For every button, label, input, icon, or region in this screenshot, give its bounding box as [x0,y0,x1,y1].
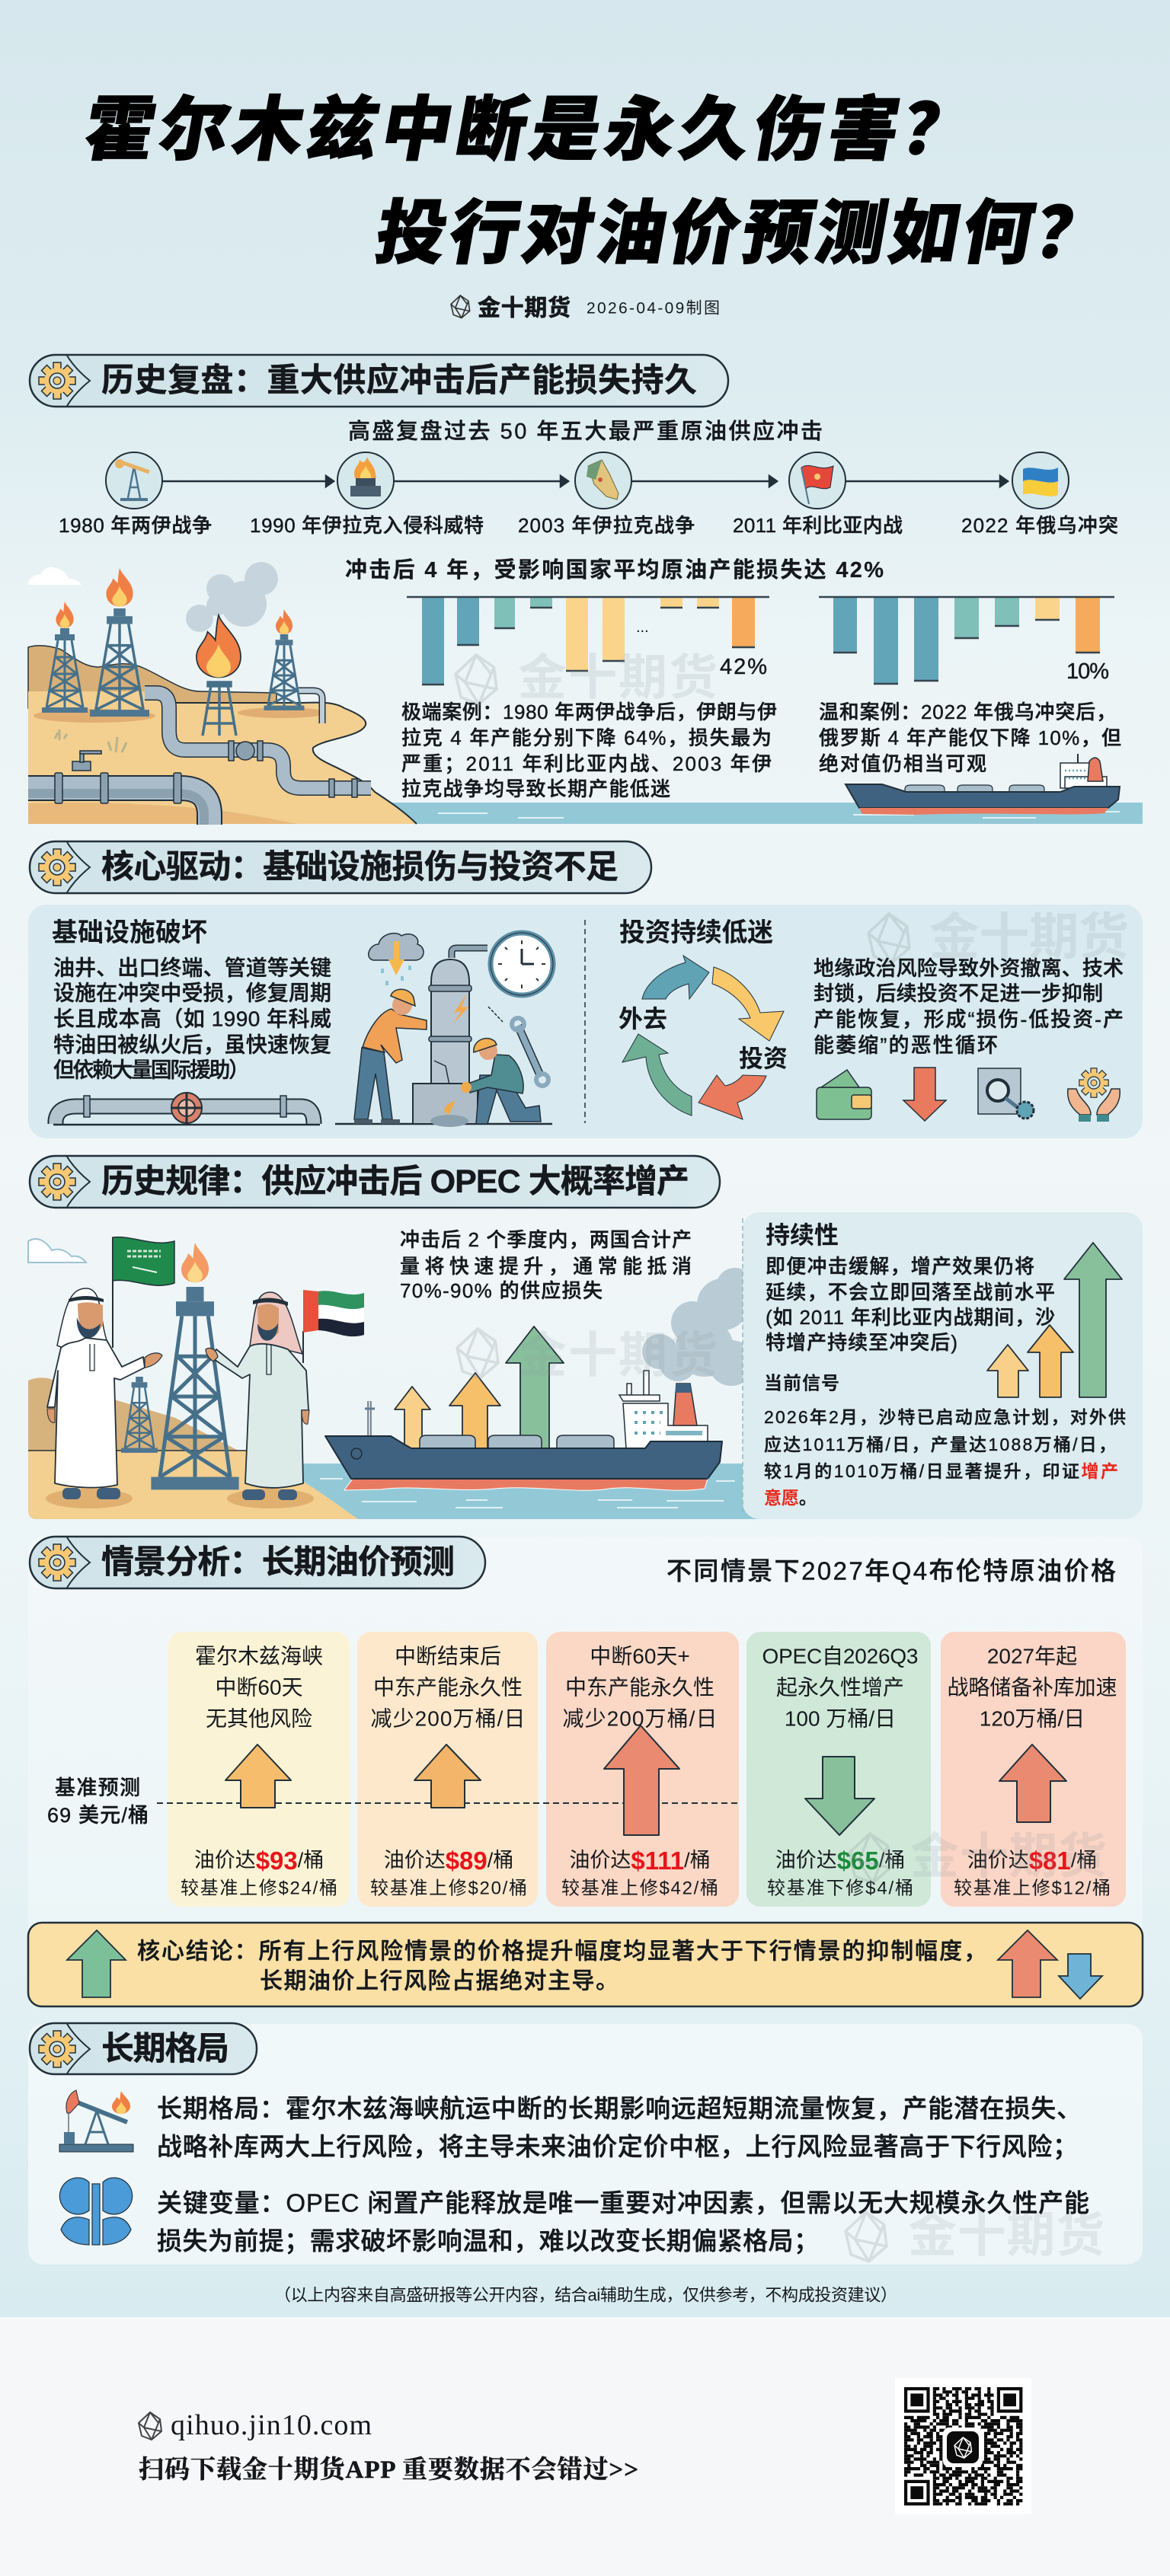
icon: down arrow [903,1068,946,1121]
card 4 [746,1632,931,1907]
cloud [369,934,424,960]
icon: pumpjack [106,452,162,509]
section header: 情景分析: 情景分析：长期油价预测 [101,1544,455,1581]
text: long-term outlook [157,2094,1082,2161]
price labels: 油价达$89/桶 [384,1846,513,1875]
subtitle: 产能损失 42%: 冲击后 4 年，受影响国家平均原油产能损失达 42% [345,557,884,583]
illustration: workers repairing tower [335,933,553,1127]
card 1: 中断60天 [215,1675,303,1700]
section header: 长期格局 [30,2023,257,2074]
card 1 [168,1632,350,1907]
person left [47,1288,162,1499]
bar chart: moderate case [819,597,1114,684]
panel: long-term outlook [28,2023,1143,2265]
text: moderate case: 绝对值仍相当可观 [819,752,986,775]
Saudi flag [113,1237,174,1348]
card 2 [357,1632,538,1907]
small dashed arrow [488,1007,503,1022]
card 5: 120万桶/日 [980,1707,1085,1730]
section header: 核心驱动 [30,841,651,893]
text: conclusion [137,1939,986,1993]
bar chart: moderate case: 10% [1066,659,1109,684]
watermark: 金十期货 [908,2207,1104,2262]
card 2: 减少200万桶/日 [370,1707,526,1730]
cloud [28,1239,86,1262]
change labels: 较基准上修$20/桶 [370,1878,527,1899]
icon: OPEC logo [59,2178,133,2245]
growth arrows [987,1243,1122,1397]
timeline labels: 2011 年利比亚内战 [733,514,903,537]
text: current signal [764,1407,1126,1508]
text: persistence: (如 2011 年利比亚内战期间，沙 [766,1306,1055,1329]
icon: wallet [817,1070,871,1119]
text: key variable: 损失为前提；需求破坏影响温和，难以改变长期偏紧格局； [157,2226,819,2255]
arrow: green [622,1034,692,1116]
card 4: OPEC自2026Q3 [762,1645,919,1668]
card 5: 2027年起 [987,1645,1077,1668]
arrow: red [698,1075,766,1119]
card 3: 中断60天+ [590,1645,690,1668]
text: persistence [766,1255,1055,1354]
text: infrastructure damage: 特油田被纵火后，虽快速恢复 [53,1033,331,1057]
illustration: broken pipe with valve [53,1093,320,1125]
arrow: red up [998,1930,1057,1997]
title [78,91,1114,273]
brand line [451,295,720,321]
text: infrastructure damage: 长且成本高（如 1990 年科威 [53,1007,331,1031]
baseline label [47,1776,149,1827]
QR code [895,2378,1031,2514]
divider [584,920,586,1123]
text: infrastructure damage: 设施在冲突中受损，修复周期 [53,981,331,1005]
icon: Libya flag [789,452,846,509]
card 3: 减少200万桶/日 [562,1707,718,1730]
timeline labels: 1990 年伊拉克入侵科威特 [250,514,484,537]
card 2: 中断结束后 [395,1645,501,1668]
price labels: 油价达$65/桶 [775,1846,905,1875]
cycle labels: 外去 [619,1005,667,1033]
baseline label: 69 美元/桶 [47,1804,149,1827]
sand [28,691,417,824]
text: infrastructure damage: 但依赖大量国际援助） [53,1058,250,1081]
disclaimer: （以上内容来自高盛研报等公开内容，结合ai辅助生成，仅供参考，不构成投资建议） [274,2286,897,2304]
text: conclusion: 核心结论：所有上行风险情景的价格提升幅度均显著大于下行情景的抑制幅度， [137,1939,986,1965]
UAE flag [303,1290,364,1363]
text: persistence: 延续，不会立即回落至战前水平 [766,1281,1055,1304]
sea [303,1464,762,1519]
bar chart: extreme case [407,597,769,685]
title: 投行对油价预测如何？ [370,194,1114,273]
flare stack [203,682,236,736]
hill [28,1377,238,1451]
text: low investment: 封锁，后续投资不足进一步抑制 [814,982,1103,1005]
text: long-term outlook: 战略补库两大上行风险，将主导未来油价定价中枢，上行风险显著高于下行风险； [157,2132,1078,2161]
icon: hands holding gear [1068,1068,1120,1122]
watermark: 金十期货 [518,650,718,705]
brand line: 2026-04-09制图 [587,300,720,317]
text: OPEC response: 冲击后 2 个季度内，两国合计产 [400,1228,692,1251]
brand line: 金十期货 [478,295,571,321]
text: OPEC response [400,1228,692,1302]
heading: current signal: 当前信号 [764,1374,839,1393]
text: current signal: 意愿。 [764,1488,817,1508]
text: infrastructure damage [53,956,331,1081]
flame [181,1243,209,1282]
price labels: 油价达$81/桶 [967,1846,1097,1875]
large derrick [151,1287,239,1489]
scenario cards [157,1632,1126,1907]
section header: 情景分析 [30,1537,485,1588]
change labels: 较基准上修$42/桶 [561,1878,718,1899]
clock [491,933,553,995]
text: current signal: 应达1011万桶/日，产量达1088万桶/日， [764,1435,1116,1454]
title: 霍尔木兹中断是永久伤害？ [78,91,980,169]
footer brand: 扫码下载金十期货APP 重要数据不会错过>> [139,2456,638,2484]
cloud [28,567,82,585]
text: moderate case: 俄罗斯 4 年产能仅下降 10%，但 [819,726,1121,749]
person right [206,1292,309,1500]
illustration: tanker [846,754,1120,815]
price labels: 油价达$111/桶 [569,1846,711,1875]
arrows [225,1725,1066,1835]
pipelines [28,788,209,825]
watermark: 金十期货 [929,908,1129,965]
section header: 核心驱动: 核心驱动：基础设施损伤与投资不足 [101,849,619,886]
heading: infrastructure damage: 基础设施破坏 [52,918,207,947]
cycle labels: 投资 [739,1045,788,1072]
footer brand [139,2409,638,2484]
text: low investment: 产能恢复，形成“损伤-低投资-产 [814,1008,1124,1031]
baseline [157,1802,739,1804]
arrows [162,476,1008,487]
icon: Iraq map [575,452,631,509]
card 5 [941,1632,1126,1907]
arrow: yellow [712,967,784,1041]
worker standing [354,1048,392,1119]
text: low investment: 能萎缩”的恶性循环 [814,1034,998,1057]
baseline label: 基准预测 [55,1776,140,1799]
bar chart: extreme case: 42% [720,655,767,679]
callout: core conclusion [28,1923,1143,2006]
text: OPEC response: 70%-90% 的供应损失 [400,1279,603,1302]
smoke [642,1268,754,1386]
small derrick [121,1377,158,1453]
section header: 长期格局: 长期格局 [101,2031,229,2067]
cycle diagram [619,956,788,1119]
card 3 [546,1632,739,1907]
icon: burning oil tank [337,452,394,509]
illustration: OPEC scene [28,1237,762,1519]
subtitle: 五大供应冲击: 高盛复盘过去 50 年五大最严重原油供应冲击 [348,419,823,444]
chart title: 不同情景下2027年Q4布伦特原油价格 [667,1556,1116,1585]
text: moderate case [819,701,1121,775]
text: extreme case: 极端案例：1980 年两伊战争后，伊朗与伊 [401,701,777,723]
sand [28,1451,358,1519]
tanker [325,1371,722,1490]
section header: 历史复盘: 历史复盘：重大供应冲击后产能损失持久 [101,362,697,399]
card 5: 战略储备补库加速 [948,1675,1117,1700]
price labels [194,1846,1097,1875]
tower [452,948,488,958]
timeline labels: 1980 年两伊战争 [59,514,212,537]
icon: pumpjack with flame [59,2090,133,2152]
worker kneeling [476,1075,541,1124]
wrench [518,1026,541,1077]
text: persistence: 特增产持续至冲突后) [766,1331,957,1354]
section header: 历史规律 [30,1156,720,1208]
card 1: 霍尔木兹海峡 [195,1645,323,1668]
watermark: 金十期货 [518,1328,718,1383]
card 1: 无其他风险 [206,1707,312,1730]
smoke [186,562,278,632]
arrow: green up [67,1930,126,1997]
icon: Ukraine flag [1012,452,1069,509]
growth arrows [395,1326,564,1448]
text: low investment [814,957,1124,1057]
text: key variable: 关键变量：OPEC 闲置产能释放是唯一重要对冲因素，但需以无大规模永久性产能 [157,2188,1089,2217]
text: long-term outlook: 长期格局：霍尔木兹海峡航运中断的长期影响远超短期流量恢复，产能潜在损失、 [157,2094,1082,2123]
text: infrastructure damage: 油井、出口终端、管道等关键 [53,956,331,979]
heading: persistence: 持续性 [766,1221,839,1249]
panel: persistence [743,1212,1143,1519]
pipe flanges and valve [55,741,357,803]
card 3: 中东产能永久性 [565,1675,714,1700]
heading: low investment: 投资持续低迷 [619,918,773,947]
text: moderate case: 温和案例：2022 年俄乌冲突后， [819,701,1116,723]
price labels: 油价达$93/桶 [194,1846,324,1875]
text: extreme case: 严重；2011 年利比亚内战、2003 年伊 [401,752,772,775]
watermark: 金十期货 [910,1829,1107,1884]
card 4: 100 万桶/日 [785,1707,896,1730]
arrow: blue down [1059,1954,1102,1999]
panel: core drivers [28,905,1143,1138]
text: key variable [157,2188,1089,2255]
section header: 历史复盘 [30,355,728,407]
timeline labels [59,514,1118,537]
text: low investment: 地缘政治风险导致外资撤离、技术 [814,957,1124,980]
card 4: 起永久性增产 [776,1675,904,1700]
section header: 历史规律: 历史规律：供应冲击后 OPEC 大概率增产 [101,1164,689,1200]
panel: scenario background [28,1537,1143,1995]
change labels: 较基准上修$24/桶 [181,1878,337,1899]
change labels [181,1878,1111,1899]
illustration: oil field and pipelines [28,562,1143,825]
text: current signal: 较1月的1010万桶/日显著提升，印证增产 [764,1461,1118,1481]
text: OPEC response: 量将快速提升，通常能抵消 [400,1255,692,1278]
timeline labels: 2003 年伊拉克战争 [518,514,695,537]
cycle labels [619,1005,788,1072]
icon: blocked technology [978,1068,1034,1119]
derricks [42,628,88,713]
arrow: blue [642,956,709,999]
text: persistence: 即便冲击缓解，增产效果仍将 [766,1255,1034,1278]
timeline [59,452,1118,537]
hill [28,646,277,708]
grass [55,729,126,752]
text: current signal: 2026年2月，沙特已启动应急计划，对外供 [764,1407,1126,1427]
flames [56,568,292,678]
footer background [0,2317,1170,2576]
change labels: 较基准下修$4/桶 [767,1878,913,1899]
sea [381,803,1143,824]
bar chart: extreme case: ... [636,619,649,636]
text: extreme case: 拉克 4 年产能分别下降 64%，损失最为 [401,726,772,749]
text: extreme case: 拉克战争均导致长期产能低迷 [401,777,670,800]
card 2: 中东产能永久性 [373,1675,523,1700]
text: conclusion: 长期油价上行风险占据绝对主导。 [260,1969,619,1993]
change labels: 较基准上修$12/桶 [954,1878,1111,1899]
timeline labels: 2022 年俄乌冲突 [961,514,1118,537]
footer brand: qihuo.jin10.com [171,2409,372,2441]
text: extreme case [401,701,777,800]
